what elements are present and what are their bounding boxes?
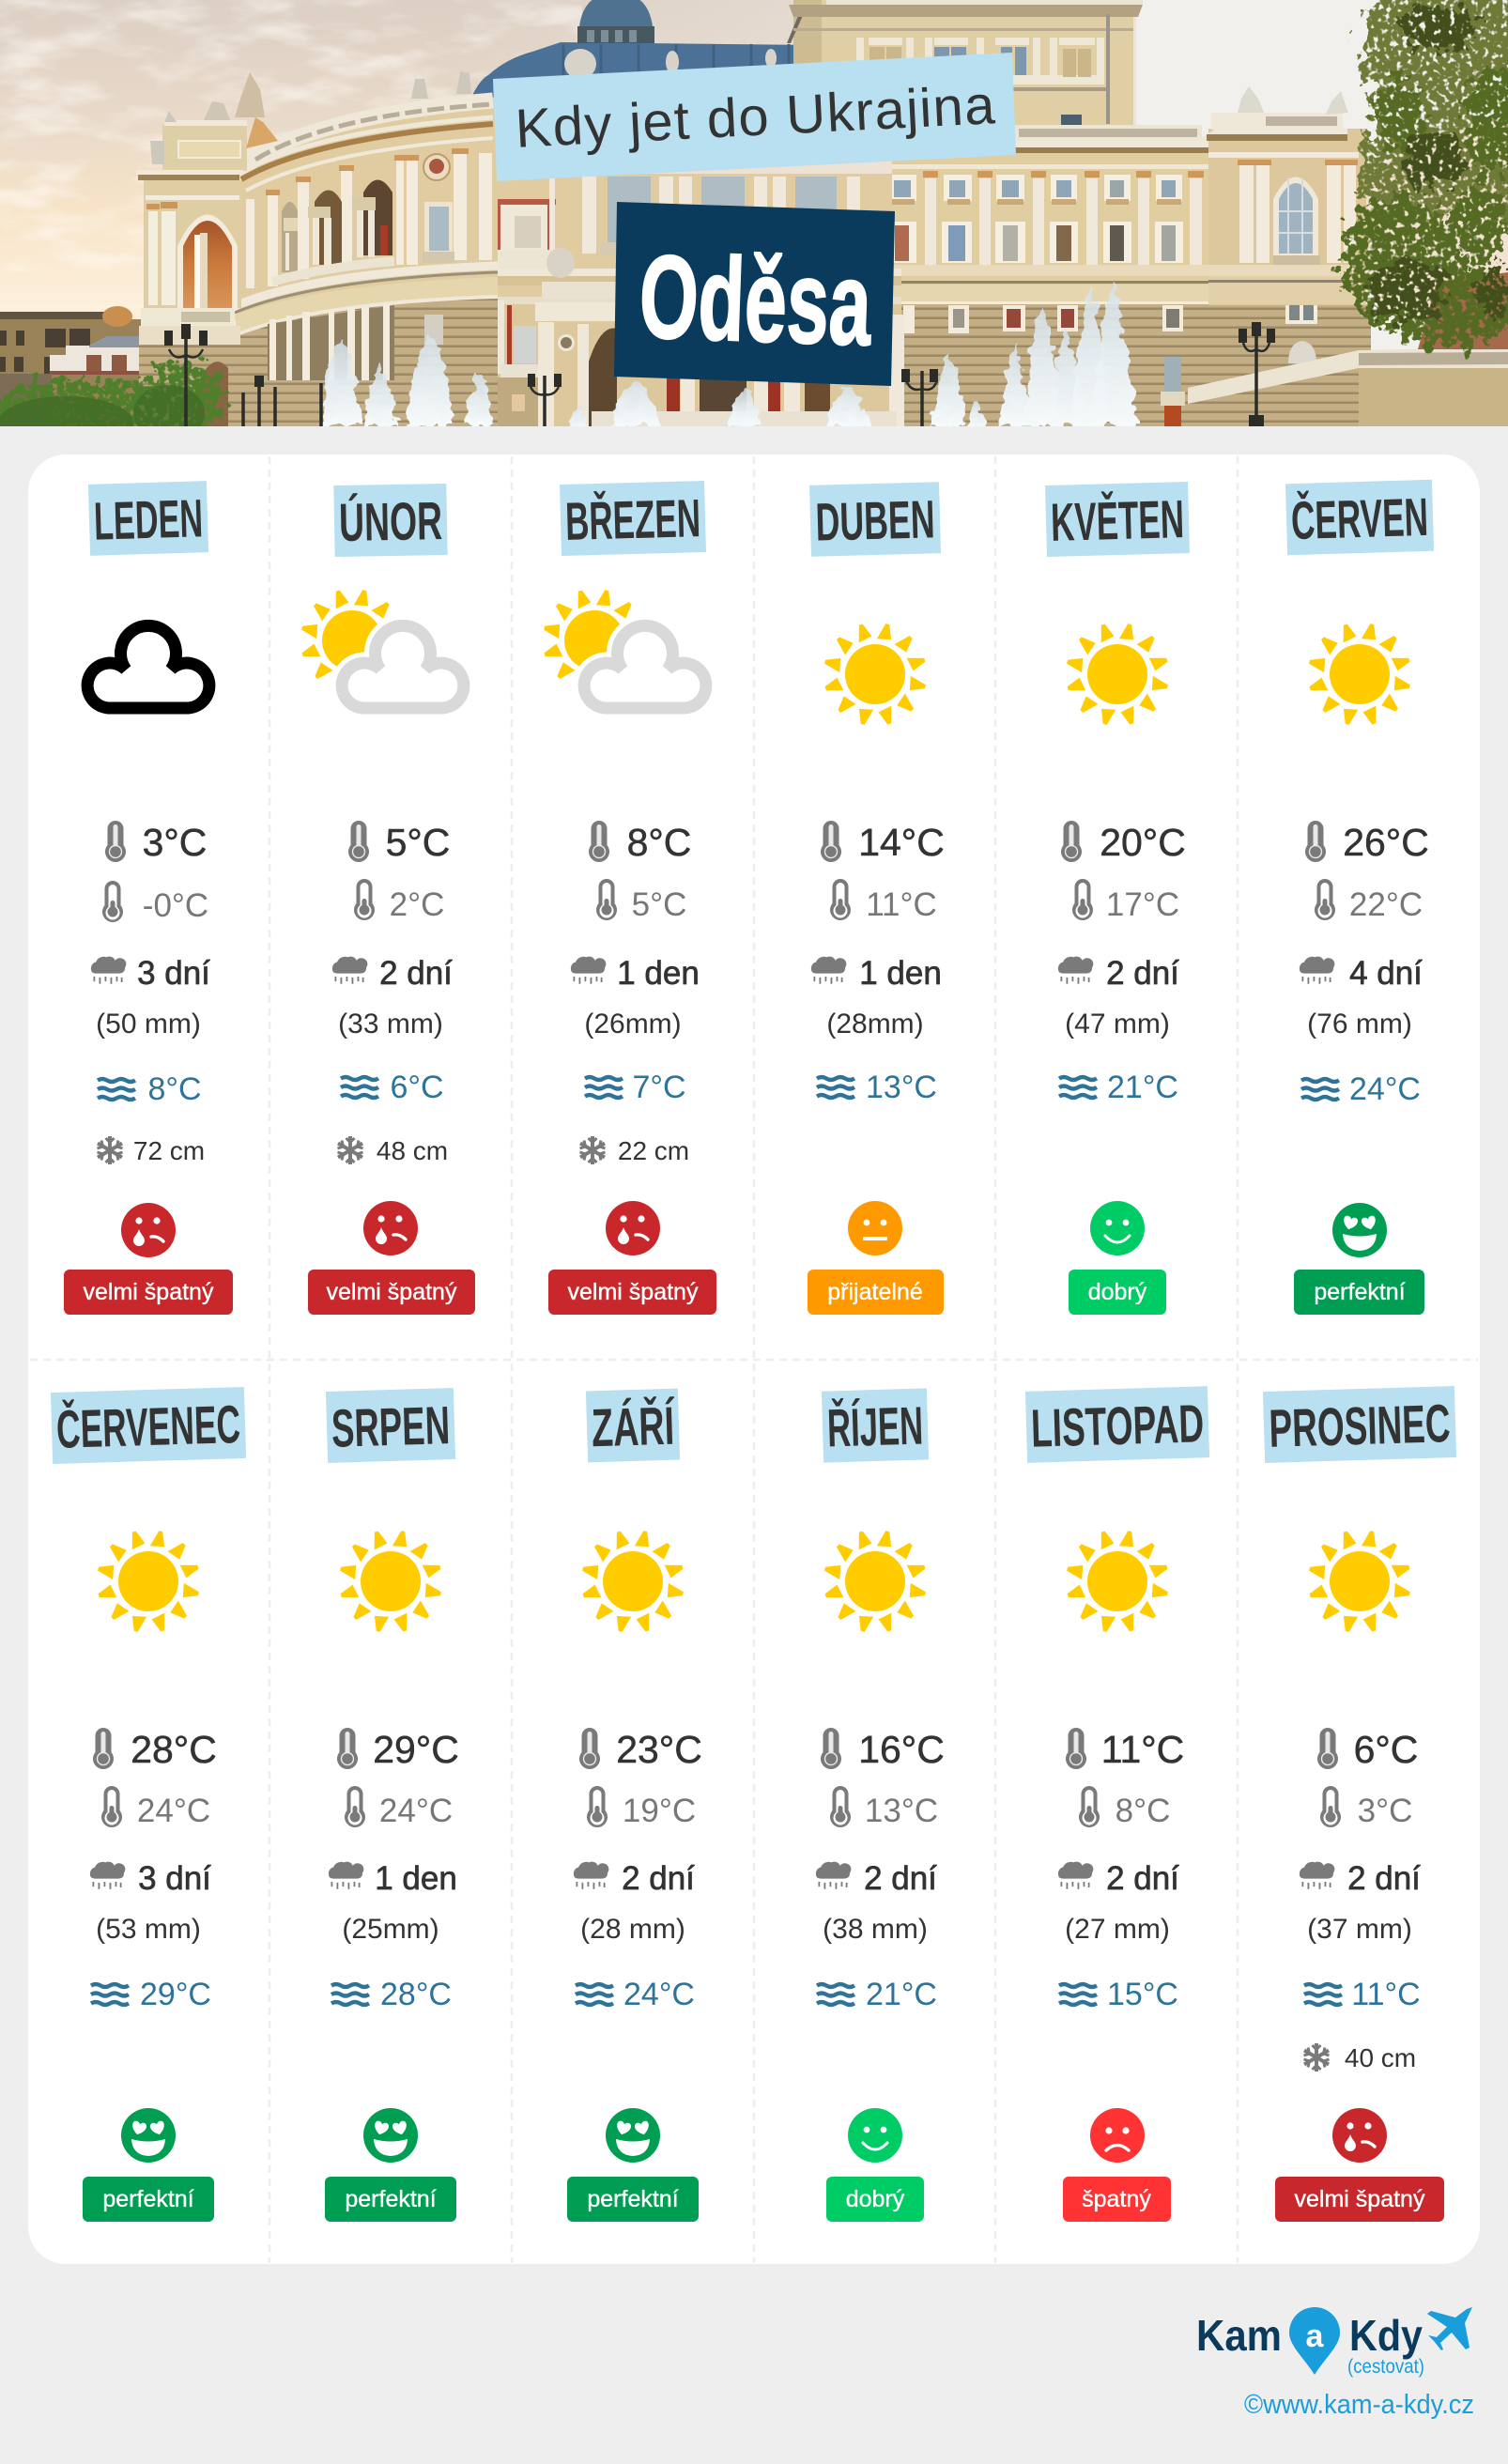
month heading bbox=[1045, 482, 1190, 557]
water temperature bbox=[341, 1070, 444, 1105]
icon: sun bbox=[1066, 623, 1169, 726]
rain days bbox=[816, 1860, 937, 1897]
water temperature bbox=[91, 1977, 211, 2012]
rating badge bbox=[83, 2177, 214, 2222]
precipitation: (27 mm) bbox=[1065, 1914, 1170, 1945]
low temperature bbox=[101, 1786, 210, 1829]
water temperature bbox=[1301, 1071, 1421, 1107]
icon: rating face bbox=[1090, 1201, 1145, 1255]
icon: rating face bbox=[606, 1201, 660, 1255]
month heading: BŘEZEN bbox=[564, 487, 701, 552]
rating badge bbox=[1069, 1270, 1166, 1315]
rating badge bbox=[1063, 2177, 1171, 2222]
rain days: 4 dní bbox=[1349, 955, 1423, 992]
high temperature: 29°C bbox=[373, 1728, 459, 1771]
rating badge: velmi špatný bbox=[1295, 2186, 1425, 2212]
icon: rating face bbox=[363, 2108, 418, 2163]
low temperature: 24°C bbox=[379, 1793, 453, 1829]
month heading: LISTOPAD bbox=[1030, 1394, 1205, 1459]
low temperature: 24°C bbox=[137, 1793, 210, 1829]
month heading bbox=[1285, 480, 1434, 555]
icon: rating face bbox=[121, 2108, 176, 2163]
water temperature: 24°C bbox=[1349, 1071, 1421, 1107]
icon: rating face bbox=[363, 1201, 418, 1255]
high temperature bbox=[821, 1728, 945, 1771]
high temperature: 3°C bbox=[143, 821, 207, 864]
water temperature: 28°C bbox=[380, 1977, 452, 2012]
month heading bbox=[1263, 1386, 1456, 1463]
rain days bbox=[1300, 955, 1423, 992]
low temperature bbox=[587, 1786, 696, 1829]
precipitation: (47 mm) bbox=[1065, 1009, 1170, 1040]
logo: Kam a Kdy: (cestovat) bbox=[1347, 2356, 1424, 2378]
panel: November bbox=[1025, 1386, 1209, 2222]
precipitation: (53 mm) bbox=[96, 1914, 201, 1945]
low temperature: 19°C bbox=[623, 1793, 696, 1829]
icon: rating face bbox=[848, 2108, 902, 2163]
rain days: 2 dní bbox=[1347, 1860, 1421, 1897]
water temperature: 29°C bbox=[140, 1977, 211, 2012]
icon: cloud bbox=[87, 625, 209, 708]
low temperature: 2°C bbox=[390, 886, 444, 923]
low temperature bbox=[345, 1786, 453, 1829]
high temperature: 8°C bbox=[627, 821, 691, 864]
rain days: 3 dní bbox=[137, 955, 210, 992]
rating badge bbox=[826, 2177, 924, 2222]
month heading: DUBEN bbox=[815, 489, 935, 553]
month heading: ZÁŘÍ bbox=[591, 1395, 676, 1458]
month heading: ČERVENEC bbox=[55, 1394, 241, 1460]
low temperature bbox=[1320, 1786, 1412, 1829]
icon: rating face bbox=[848, 1201, 902, 1255]
icon: sun bbox=[1308, 1530, 1411, 1633]
panel: April bbox=[808, 482, 945, 1315]
panel: May bbox=[1045, 482, 1190, 1315]
low temperature bbox=[830, 879, 937, 923]
high temperature bbox=[93, 1728, 217, 1771]
snow depth bbox=[98, 1136, 205, 1165]
water temperature bbox=[1059, 1070, 1178, 1105]
rating badge: perfektní bbox=[587, 2186, 679, 2212]
icon: rating face bbox=[1332, 2108, 1387, 2163]
low temperature: -0°C bbox=[143, 887, 208, 924]
icon: map pin bbox=[1289, 2307, 1340, 2375]
icon: sun bbox=[1066, 1530, 1169, 1633]
low temperature: 13°C bbox=[865, 1793, 938, 1829]
water temperature bbox=[585, 1070, 686, 1105]
logo: Kam a Kdy: Kdy bbox=[1349, 2311, 1423, 2360]
rain days bbox=[91, 955, 210, 992]
rain days bbox=[1058, 955, 1179, 992]
icon: partly cloudy bbox=[543, 589, 706, 708]
month heading: SRPEN bbox=[331, 1395, 451, 1459]
high temperature bbox=[348, 821, 450, 864]
rain days bbox=[329, 1860, 457, 1897]
icon: sun bbox=[581, 1530, 685, 1633]
rating badge bbox=[308, 1270, 475, 1315]
rain days: 1 den bbox=[617, 955, 700, 992]
title banner: Oděsa bbox=[614, 202, 895, 386]
panel: July bbox=[51, 1387, 246, 2222]
high temperature: 16°C bbox=[858, 1728, 945, 1771]
water temperature bbox=[817, 1070, 937, 1105]
month heading: ČERVEN bbox=[1290, 486, 1429, 551]
rain days bbox=[1058, 1860, 1179, 1897]
panel: January bbox=[64, 481, 233, 1315]
snow depth bbox=[338, 1136, 448, 1165]
rain days: 2 dní bbox=[379, 955, 453, 992]
icon: sun bbox=[1308, 623, 1411, 726]
rating badge: přijatelné bbox=[827, 1279, 923, 1305]
month heading bbox=[1025, 1386, 1209, 1463]
rating badge: perfektní bbox=[345, 2186, 437, 2212]
title banner: Kdy jet do Ukrajina bbox=[493, 53, 1016, 181]
icon: rating face bbox=[1090, 2108, 1145, 2163]
rain days bbox=[574, 1860, 695, 1897]
title banner: Oděsa: Oděsa bbox=[638, 230, 874, 370]
icon: rating face bbox=[1332, 1203, 1387, 1257]
logo: Kam a Kdy: Kam bbox=[1196, 2311, 1282, 2360]
low temperature bbox=[596, 879, 686, 923]
icon: sun bbox=[823, 623, 927, 726]
high temperature: 11°C bbox=[1101, 1728, 1184, 1771]
low temperature: 11°C bbox=[866, 886, 937, 923]
precipitation: (33 mm) bbox=[338, 1009, 443, 1040]
month heading bbox=[809, 482, 941, 557]
month heading: ÚNOR bbox=[338, 491, 443, 553]
rain days bbox=[811, 955, 942, 992]
panel: September bbox=[567, 1389, 702, 2222]
rating badge: dobrý bbox=[1088, 1279, 1147, 1305]
rating badge: špatný bbox=[1082, 2186, 1151, 2212]
low temperature bbox=[830, 1786, 938, 1829]
water temperature bbox=[98, 1071, 202, 1107]
month heading bbox=[560, 481, 706, 556]
high temperature bbox=[589, 821, 691, 864]
rain days: 1 den bbox=[375, 1860, 457, 1897]
low temperature: 5°C bbox=[632, 886, 686, 923]
high temperature bbox=[821, 821, 945, 864]
high temperature: 23°C bbox=[616, 1728, 702, 1771]
water temperature bbox=[817, 1977, 937, 2012]
precipitation: (28 mm) bbox=[580, 1914, 685, 1945]
month heading: LEDEN bbox=[93, 488, 204, 552]
rain days bbox=[571, 955, 700, 992]
high temperature bbox=[1305, 821, 1429, 864]
logo: Kam a Kdy bbox=[1196, 2307, 1472, 2378]
high temperature: 20°C bbox=[1100, 821, 1186, 864]
icon: rating face bbox=[121, 1203, 176, 1257]
rain days: 2 dní bbox=[1106, 955, 1179, 992]
water temperature bbox=[576, 1977, 695, 2012]
panel: monthly climate card bbox=[28, 454, 1480, 2264]
month heading bbox=[88, 481, 208, 556]
rating badge: velmi špatný bbox=[568, 1279, 699, 1305]
high temperature: 5°C bbox=[386, 821, 450, 864]
rating badge bbox=[325, 2177, 456, 2222]
low temperature: 8°C bbox=[1116, 1793, 1170, 1829]
rain days bbox=[332, 955, 453, 992]
rating badge: velmi špatný bbox=[84, 1279, 214, 1305]
icon: sun bbox=[823, 1530, 927, 1633]
month heading bbox=[333, 484, 448, 557]
icon: sun bbox=[339, 1530, 442, 1633]
panel: August bbox=[325, 1388, 459, 2222]
snow depth: 72 cm bbox=[133, 1136, 205, 1165]
rating badge bbox=[808, 1270, 944, 1315]
rating badge bbox=[1294, 1270, 1424, 1315]
water temperature bbox=[331, 1977, 452, 2012]
rating badge bbox=[1275, 2177, 1444, 2222]
month heading: ŘÍJEN bbox=[826, 1395, 924, 1458]
panel: October bbox=[816, 1388, 945, 2222]
precipitation: (50 mm) bbox=[96, 1009, 201, 1040]
water temperature: 6°C bbox=[390, 1070, 444, 1105]
precipitation: (76 mm) bbox=[1307, 1009, 1412, 1040]
rating badge bbox=[548, 1270, 716, 1315]
panel: June bbox=[1285, 480, 1434, 1315]
panel: December bbox=[1263, 1386, 1456, 2222]
water temperature bbox=[1304, 1977, 1421, 2012]
rating badge: velmi špatný bbox=[327, 1279, 457, 1305]
precipitation: (25mm) bbox=[342, 1914, 439, 1945]
icon: sun bbox=[97, 1530, 200, 1633]
hero photo: Odessa opera house bbox=[0, 0, 1508, 457]
title banner: Kdy jet do Ukrajina: Kdy jet do Ukrajina bbox=[514, 74, 997, 160]
snow depth bbox=[580, 1136, 689, 1165]
icon: map pin: a bbox=[1306, 2318, 1325, 2354]
high temperature bbox=[1061, 821, 1186, 864]
rating badge bbox=[64, 1270, 233, 1315]
icon: plane bbox=[1427, 2307, 1472, 2350]
rating badge: perfektní bbox=[102, 2186, 194, 2212]
rain days: 2 dní bbox=[622, 1860, 695, 1897]
low temperature bbox=[1079, 1786, 1170, 1829]
high temperature: 14°C bbox=[858, 821, 945, 864]
rain days: 3 dní bbox=[138, 1860, 211, 1897]
month heading bbox=[51, 1387, 246, 1464]
low temperature: 22°C bbox=[1349, 886, 1423, 923]
water temperature: 21°C bbox=[866, 1977, 937, 2012]
rating badge: dobrý bbox=[846, 2186, 905, 2212]
low temperature bbox=[1072, 879, 1179, 923]
precipitation: (28mm) bbox=[826, 1009, 924, 1040]
month heading bbox=[326, 1388, 455, 1463]
precipitation: (26mm) bbox=[584, 1009, 682, 1040]
low temperature bbox=[354, 879, 444, 923]
water temperature: 21°C bbox=[1107, 1070, 1178, 1105]
icon: partly cloudy bbox=[300, 589, 464, 708]
snow depth: 22 cm bbox=[618, 1136, 689, 1165]
high temperature bbox=[1317, 1728, 1418, 1771]
water temperature: 15°C bbox=[1107, 1977, 1178, 2012]
low temperature bbox=[1315, 879, 1423, 923]
high temperature: 28°C bbox=[131, 1728, 217, 1771]
water temperature bbox=[1059, 1977, 1178, 2012]
water temperature: 24°C bbox=[623, 1977, 695, 2012]
rain days: 2 dní bbox=[1106, 1860, 1179, 1897]
high temperature: 6°C bbox=[1354, 1728, 1418, 1771]
month heading bbox=[822, 1388, 929, 1463]
snow depth bbox=[1303, 2043, 1416, 2072]
panel: March bbox=[543, 481, 716, 1315]
water temperature: 11°C bbox=[1351, 1977, 1421, 2012]
low temperature: 17°C bbox=[1106, 886, 1179, 923]
rain days bbox=[1300, 1860, 1421, 1897]
rating badge bbox=[567, 2177, 699, 2222]
rating badge: perfektní bbox=[1314, 1279, 1406, 1305]
water temperature: 13°C bbox=[866, 1070, 937, 1105]
website credit: ©www.kam-a-kdy.cz bbox=[1244, 2390, 1474, 2420]
low temperature: 3°C bbox=[1358, 1793, 1412, 1829]
rain days: 2 dní bbox=[864, 1860, 937, 1897]
high temperature bbox=[105, 821, 207, 864]
high temperature: 26°C bbox=[1343, 821, 1429, 864]
low temperature bbox=[102, 881, 208, 924]
rain days: 1 den bbox=[859, 955, 942, 992]
month heading: KVĚTEN bbox=[1050, 488, 1185, 553]
precipitation: (38 mm) bbox=[823, 1914, 928, 1945]
water temperature: 7°C bbox=[632, 1070, 686, 1105]
water temperature: 8°C bbox=[147, 1071, 202, 1107]
rain days bbox=[90, 1860, 211, 1897]
precipitation: (37 mm) bbox=[1307, 1914, 1412, 1945]
month heading bbox=[586, 1389, 680, 1462]
snow depth: 48 cm bbox=[377, 1136, 448, 1165]
panel: February bbox=[300, 484, 475, 1315]
icon: rating face bbox=[606, 2108, 660, 2163]
snow depth: 40 cm bbox=[1345, 2043, 1416, 2072]
